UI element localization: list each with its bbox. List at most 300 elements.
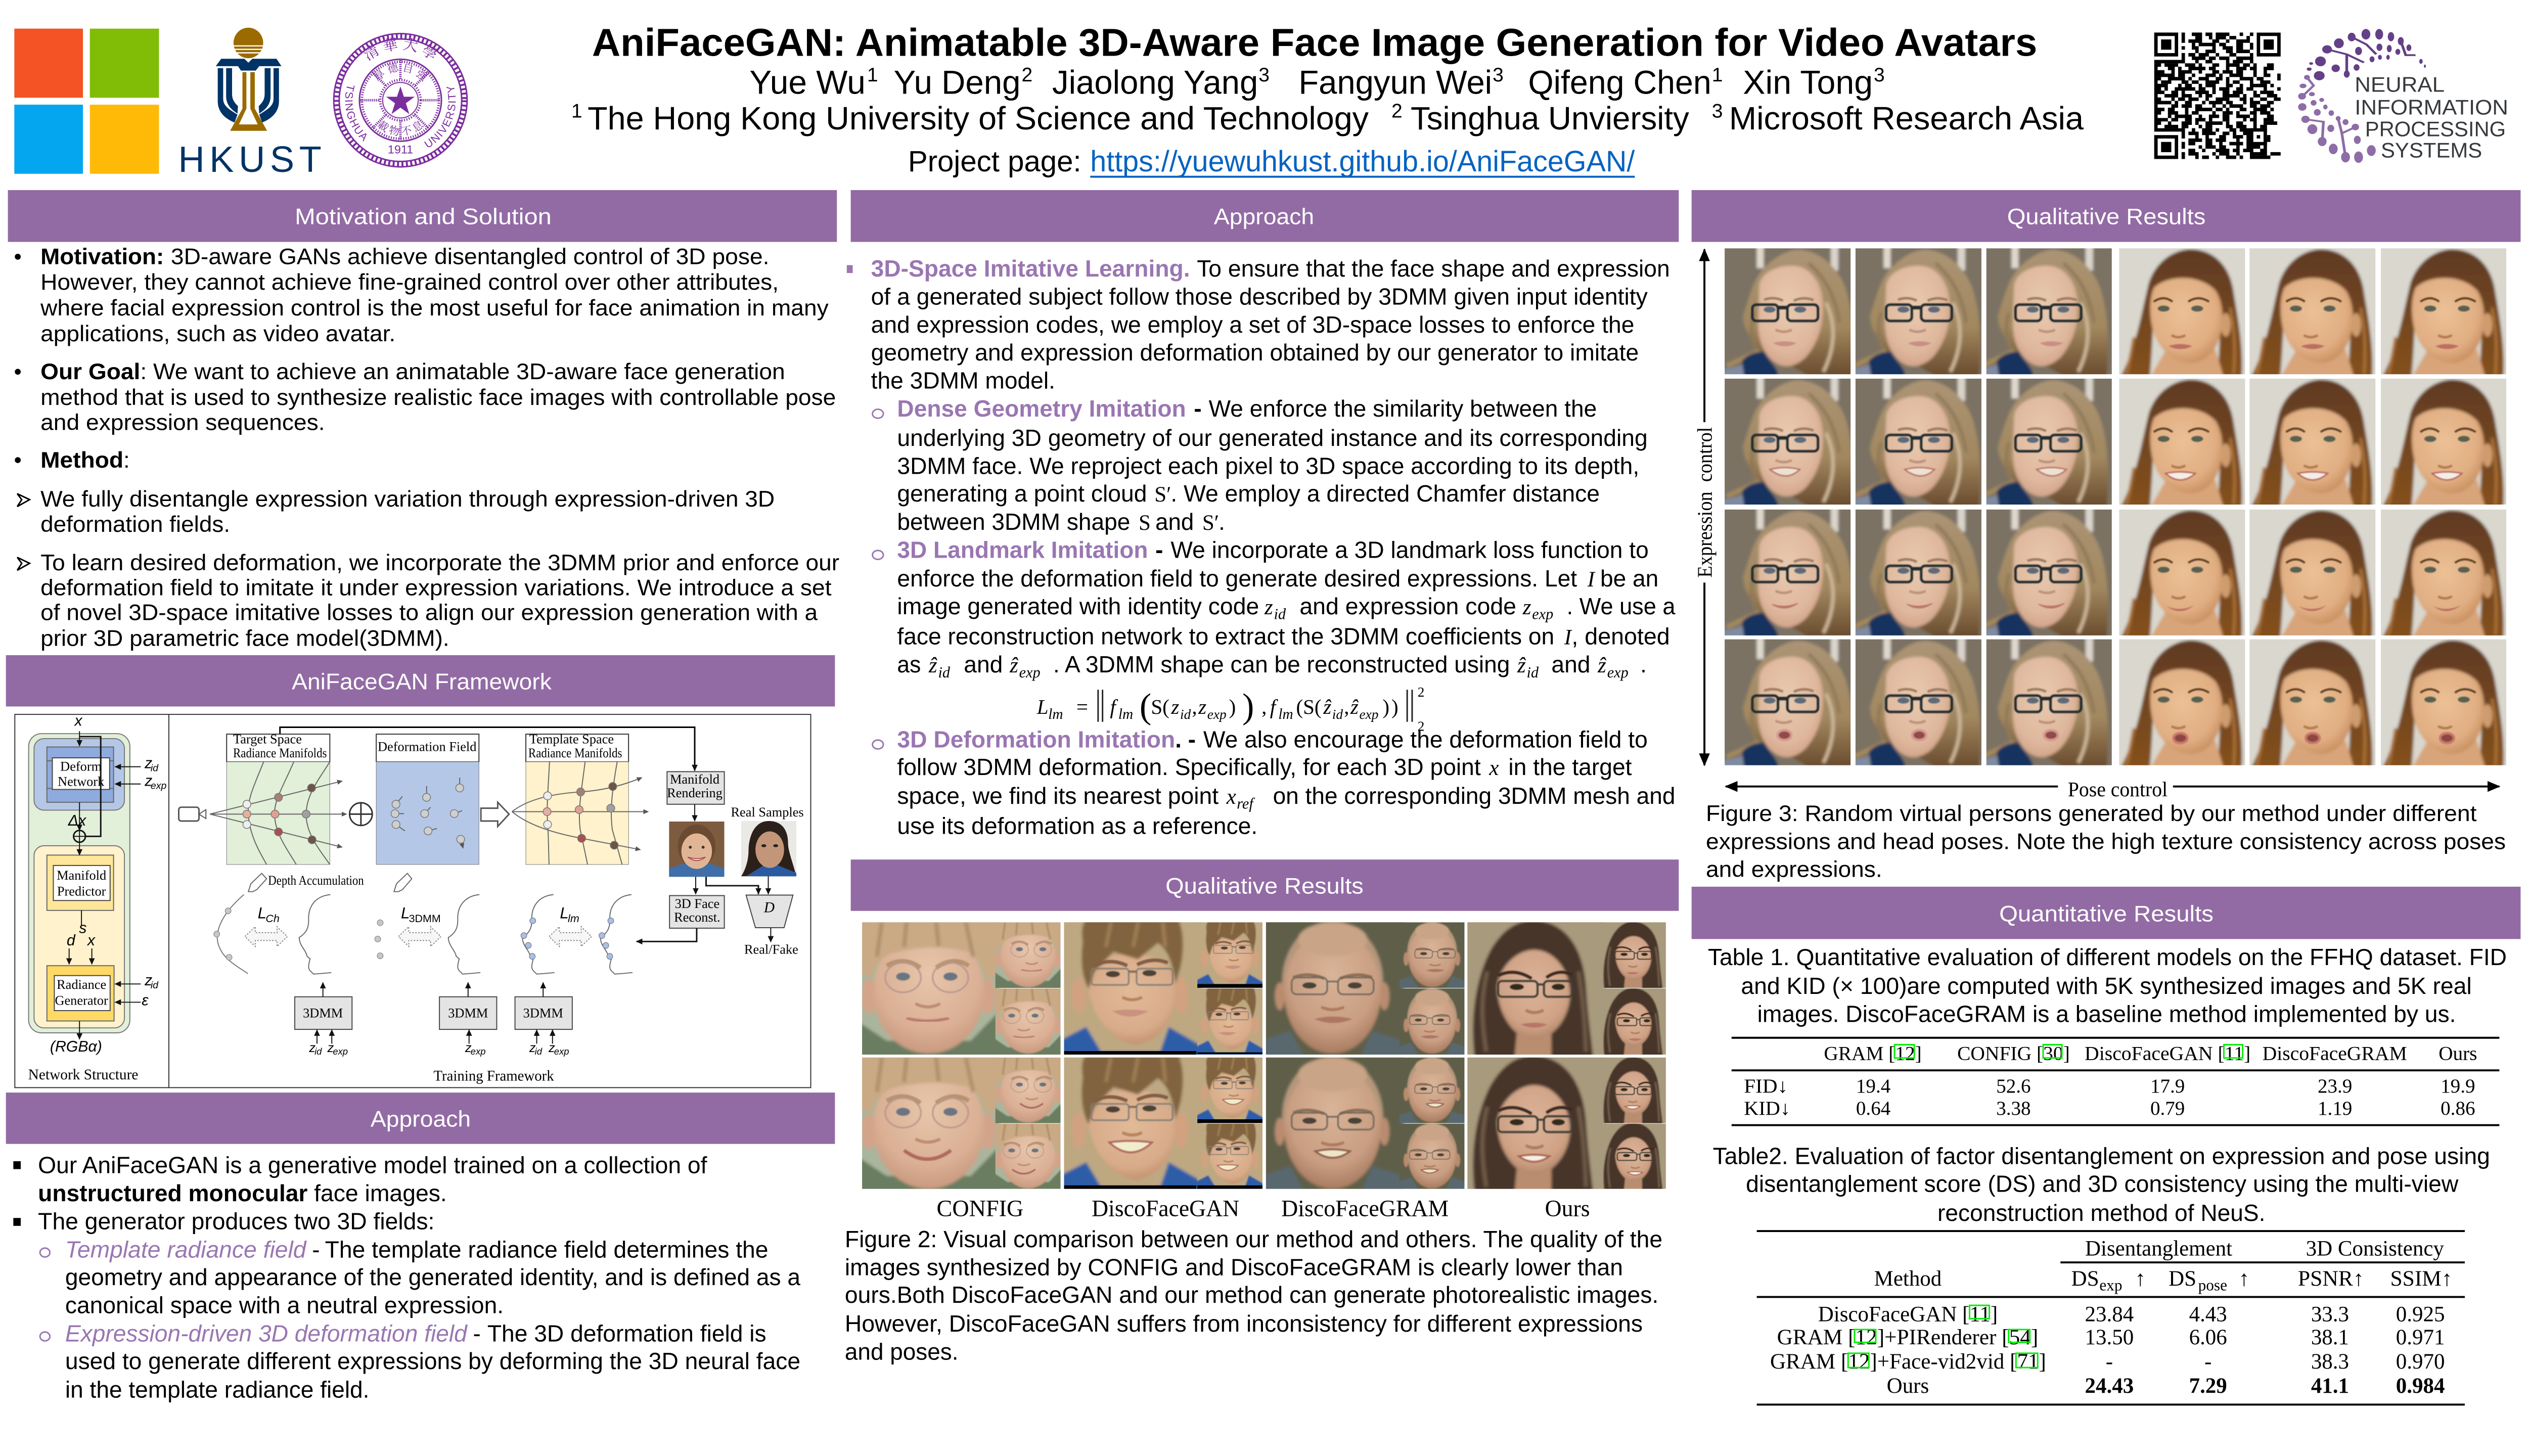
authors: 2 <box>1022 64 1032 86</box>
text block: 3D-space imitative learning: the 3DMM model. <box>871 368 1055 394</box>
table 2 <box>1757 1231 2465 1404</box>
affiliations <box>571 100 2084 136</box>
training framework: exp <box>333 1046 348 1057</box>
text block: 3D-space imitative learning: on the corresponding 3DMM mesh and <box>1273 783 1675 809</box>
network structure: Predictor <box>57 884 106 898</box>
text block: 3D-space imitative learning: z <box>1522 596 1531 619</box>
network structure: z <box>144 773 152 790</box>
figure 3 caption: Figure 3: Random virtual persons generated by our method under different <box>1706 800 2477 826</box>
table 2: SSIM↑ <box>2390 1267 2453 1291</box>
authors <box>749 64 1885 101</box>
tile: DiscoFaceGAN neutral <box>1064 922 1262 1055</box>
project page link: https://yuewuhkust.github.io/AniFaceGAN/ <box>1090 145 1635 178</box>
text block: approach left: face images. <box>314 1180 447 1206</box>
table 1 <box>1732 1038 2499 1125</box>
text block: 3D-space imitative learning: 3D Landmark Imitation <box>897 537 1148 563</box>
authors: 1 <box>867 64 878 86</box>
table 1 caption: images. DiscoFaceGRAM is a baseline method implemented by us. <box>1757 1000 2456 1027</box>
text block: 3D-space imitative learning: , denoted <box>1571 623 1670 649</box>
training framework: id <box>314 1046 322 1057</box>
tile: DiscoFaceGAN smile <box>1064 1058 1263 1189</box>
text block: 3D-space imitative learning: 3DMM face. We reproject each pixel to 3D space according to its depth, <box>897 453 1639 479</box>
table 2: - <box>2204 1350 2211 1374</box>
text block: approach left: The generator produces two 3D fields: <box>38 1208 434 1235</box>
logo: Tsinghua University seal: 載 物 不 息 <box>377 120 424 136</box>
equation: landmark loss: lm <box>1118 706 1133 722</box>
network structure: Generator <box>55 993 108 1008</box>
network structure: d <box>67 932 76 949</box>
figure 2 caption <box>845 1226 1662 1364</box>
table 1: 52.6 <box>1996 1075 2031 1097</box>
text block: approach left: - <box>473 1320 481 1346</box>
text block: 3D-space imitative learning: enforce the deformation field to generate desired expressions. Let <box>897 565 1577 592</box>
text block: 3D-space imitative learning: I <box>1564 625 1572 649</box>
table 2: 41.1 <box>2311 1374 2349 1398</box>
text block: motivation: applications, such as video avatar. <box>40 321 395 346</box>
training framework: z <box>548 1041 555 1055</box>
equation: landmark loss: id <box>1332 707 1343 722</box>
text block: approach left: used to generate different expressions by deforming the 3D neural face <box>65 1348 800 1374</box>
figure 3: expression and pose grid <box>1710 243 2524 770</box>
equation: landmark loss: , <box>1261 695 1267 718</box>
text block: approach left: in the template radiance field. <box>65 1377 369 1403</box>
training framework: z <box>327 1041 334 1055</box>
table 2: 3D Consistency <box>2306 1237 2444 1260</box>
table 2 caption <box>1713 1143 2490 1226</box>
figure 2 column labels <box>937 1195 1590 1221</box>
network structure: Radiance <box>57 977 106 992</box>
text block: 3D-space imitative learning: as <box>897 651 921 677</box>
network structure: Manifold <box>57 868 106 883</box>
equation: landmark loss: z <box>1170 695 1179 718</box>
figure 2 column labels: DiscoFaceGRAM <box>1281 1195 1449 1221</box>
authors: Yu Deng <box>894 64 1021 101</box>
text block: 3D-space imitative learning: and <box>1551 651 1591 677</box>
text block: 3D-space imitative learning: of a generated subject follow those described by 3DMM given input identity <box>871 284 1648 310</box>
title: AniFaceGAN: Animatable 3D-Aware Face Image Generation for Video Avatars <box>592 21 2037 64</box>
table 1: 0.64 <box>1856 1098 1890 1119</box>
text block: 3D-space imitative learning: id <box>1527 664 1539 681</box>
equation: landmark loss: f <box>1270 695 1279 718</box>
figure 2 column labels: CONFIG <box>937 1195 1023 1221</box>
text block: 3D-space imitative learning: and expression codes, we employ a set of 3D-space losses to enforce the <box>871 311 1634 338</box>
table 2: pose <box>2198 1277 2227 1294</box>
equation: landmark loss: lm <box>1278 706 1293 722</box>
panel heading: Qualitative Results (centre) <box>851 859 1679 911</box>
table 2: 38.3 <box>2311 1350 2349 1374</box>
network structure: Δx <box>68 812 87 829</box>
training framework: Radiance Manifolds <box>233 746 327 760</box>
equation: landmark loss: L <box>1036 695 1049 718</box>
text block: 3D-space imitative learning: We enforce the similarity between the <box>1209 395 1597 422</box>
training framework: 3DMM <box>303 1006 343 1021</box>
affiliations: Microsoft Research Asia <box>1729 100 2084 136</box>
network structure: z <box>144 972 152 989</box>
text block: motivation: : We want to achieve an animatable 3D-aware face generation <box>140 358 785 384</box>
equation: landmark loss: ) <box>1382 695 1389 718</box>
text block: 3D-space imitative learning: and expression code <box>1299 593 1516 619</box>
table 2: DiscoFaceGAN [11] <box>1818 1302 1998 1326</box>
table 1: 1.19 <box>2318 1098 2352 1119</box>
network structure: Network Structure <box>28 1067 138 1083</box>
text block: 3D-space imitative learning: . We employ a directed Chamfer distance <box>1170 480 1600 507</box>
diagram: framework <box>15 713 811 1087</box>
text block: 3D-space imitative learning: - <box>1194 395 1202 422</box>
table 1 caption <box>1708 944 2507 1027</box>
training framework: lm <box>568 913 579 925</box>
text block: 3D-space imitative learning: To ensure that the face shape and expression <box>1197 255 1670 282</box>
text block: 3D-space imitative learning: - <box>1155 537 1163 563</box>
text block: motivation: However, they cannot achieve fine-grained control over other attributes, <box>40 269 779 295</box>
network structure: Network <box>58 775 105 789</box>
text block: 3D-space imitative learning: exp <box>1607 664 1629 681</box>
equation: landmark loss: lm <box>1048 706 1063 722</box>
text block: approach left: geometry and appearance of the generated identity, and is defined as a <box>65 1264 800 1290</box>
network structure: ε <box>142 992 149 1009</box>
training framework: D <box>763 900 775 916</box>
text block: 3D-space imitative learning: . <box>1218 509 1225 535</box>
training framework: L <box>560 904 569 922</box>
training framework: exp <box>471 1046 486 1057</box>
text block: approach left: Template radiance field <box>65 1236 307 1262</box>
affiliations: Tsinghua Unviersity <box>1411 100 1690 136</box>
table 2: Method <box>1874 1267 1942 1291</box>
text block: 3D-space imitative learning: use its deformation as a reference. <box>897 812 1257 839</box>
equation: landmark loss: , <box>1344 695 1349 718</box>
affiliations: 1 <box>571 100 582 122</box>
figure 2 caption: Figure 2: Visual comparison between our method and others. The quality of the <box>845 1226 1662 1252</box>
text block: motivation: We fully disentangle expression variation through expression-driven 3D <box>40 486 775 512</box>
network structure: id <box>151 762 159 774</box>
logo: Tsinghua University seal: 厚 德 自 強 <box>373 63 427 82</box>
panel heading: Approach (left): Approach <box>371 1106 471 1132</box>
figure 3 caption: and expressions. <box>1706 856 1882 882</box>
table 2: PSNR↑ <box>2298 1267 2364 1291</box>
authors: Fangyun Wei <box>1298 64 1492 101</box>
training framework: Training Framework <box>433 1068 554 1084</box>
equation: landmark loss: , <box>1192 695 1197 718</box>
equation: landmark loss: = <box>1076 695 1088 718</box>
panel heading: AniFaceGAN Framework <box>6 655 835 706</box>
table 1: CONFIG [30] <box>1957 1043 2070 1065</box>
text block: 3D-space imitative learning: ẑ <box>1517 654 1526 677</box>
network structure: x <box>86 932 96 949</box>
text block: 3D-space imitative learning: S′ <box>1202 511 1219 535</box>
text block: 3D-space imitative learning: be an <box>1600 565 1658 592</box>
tile: Ours smile <box>1467 1058 1666 1189</box>
training framework: L <box>258 904 266 922</box>
figure 2 caption: images synthesized by CONFIG and DiscoFaceGRAM is clearly lower than <box>845 1254 1623 1280</box>
text block: 3D-space imitative learning: 3D-Space Imitative Learning. <box>871 255 1190 282</box>
panel heading: Motivation and Solution: Motivation and Solution <box>295 203 552 229</box>
text block: 3D-space imitative learning: S′ <box>1154 483 1171 507</box>
training framework: 3DMM <box>523 1006 563 1021</box>
text block: motivation: prior 3D parametric face model(3DMM). <box>40 625 449 651</box>
text block: 3D-space imitative learning: ẑ <box>928 654 937 677</box>
text block: 3D-space imitative learning: ẑ <box>1009 654 1018 677</box>
text block: motivation: Method <box>40 447 123 473</box>
text block: motivation: To learn desired deformation, we incorporate the 3DMM prior and enforce our <box>40 550 839 575</box>
panel heading: Quantitative Results: Quantitative Results <box>1999 900 2214 926</box>
figure 2: comparison faces <box>857 917 1668 1195</box>
text block: motivation: and expression sequences. <box>40 410 325 435</box>
text block: 3D-space imitative learning: . We use a <box>1567 593 1676 619</box>
project page link: Project page: <box>908 145 1081 178</box>
training framework: Real/Fake <box>744 942 798 957</box>
network structure: exp <box>151 781 166 792</box>
table 2: 33.3 <box>2311 1302 2349 1326</box>
table 2: 6.06 <box>2189 1326 2227 1349</box>
text block: 3D-space imitative learning: follow 3DMM deformation. Specifically, for each 3D point <box>897 754 1481 780</box>
table 1: 23.9 <box>2318 1075 2352 1097</box>
text block: 3D-space imitative learning: 3D Deformation Imitation <box>897 726 1175 753</box>
table 2: - <box>2106 1350 2113 1374</box>
logo: NeurIPS <box>2298 29 2508 163</box>
figure 3 caption: expressions and head poses. Note the high texture consistency across poses <box>1706 829 2506 854</box>
training framework: Deformation Field <box>378 739 476 754</box>
text block: motivation <box>15 243 839 651</box>
training framework: Rendering <box>667 786 723 800</box>
network structure: (RGBα) <box>50 1038 102 1055</box>
table 2: 38.1 <box>2311 1326 2349 1349</box>
text block: approach left: unstructured monocular <box>38 1180 308 1206</box>
table 2: 0.984 <box>2396 1374 2445 1398</box>
training framework: id <box>535 1046 543 1057</box>
table 2: 0.971 <box>2396 1326 2445 1349</box>
panel heading: Quantitative Results <box>1692 887 2520 939</box>
table 2: exp <box>2099 1277 2122 1294</box>
training framework: Template Space <box>529 732 614 747</box>
logo: Tsinghua University seal <box>333 33 468 168</box>
table 1: GRAM [12] <box>1824 1043 1922 1065</box>
table 2: GRAM [12]+Face-vid2vid [71] <box>1770 1350 2046 1374</box>
text block: 3D-space imitative learning: ẑ <box>1597 654 1606 677</box>
training framework: Radiance Manifolds <box>528 746 622 760</box>
training framework: L <box>401 904 410 922</box>
table 2 caption: disentanglement score (DS) and 3D consistency using the multi-view <box>1746 1170 2459 1197</box>
table 2: 0.925 <box>2396 1302 2445 1326</box>
panel heading: Approach (centre): Approach <box>1214 203 1314 229</box>
text block: 3D-space imitative learning: We incorporate a 3D landmark loss function to <box>1170 537 1649 563</box>
equation: landmark loss: z <box>1198 695 1206 718</box>
text block: 3D-space imitative learning: x <box>1488 756 1499 780</box>
table 2: Disentanglement <box>2085 1237 2232 1260</box>
text block: 3D-space imitative learning: id <box>938 664 951 681</box>
equation: landmark loss: f <box>1110 695 1118 718</box>
training framework: 3DMM <box>448 1006 488 1021</box>
text block: approach left: - <box>312 1236 320 1262</box>
figure 3 caption <box>1706 800 2506 882</box>
logo: NeurIPS: SYSTEMS <box>2381 139 2482 162</box>
authors: 1 <box>1712 64 1723 86</box>
training framework: Reconst. <box>674 910 720 925</box>
person B faces <box>2104 243 2524 770</box>
table 2 caption: Table2. Evaluation of factor disentanglement on expression and pose using <box>1713 1143 2490 1169</box>
logo: HKUST: HKUST <box>178 140 322 180</box>
training framework: Target Space <box>233 732 302 747</box>
panel heading: Qualitative Results (right): Qualitative Results <box>2007 203 2205 229</box>
training framework: Ch <box>265 913 280 925</box>
text block: 3D-space imitative learning: z <box>1264 596 1273 619</box>
tile: DiscoFaceGRAM smile <box>1266 1058 1464 1189</box>
table 1: 19.4 <box>1856 1075 1890 1097</box>
network structure: x <box>73 713 83 730</box>
panel heading: Approach (left) <box>6 1093 835 1144</box>
logo: Tsinghua University seal: UNIVERSITY <box>424 87 456 148</box>
network structure: z <box>144 755 152 772</box>
text block: 3D-space imitative learning: and <box>1155 509 1194 535</box>
table 2 caption: reconstruction method of NeuS. <box>1937 1200 2265 1226</box>
table 2: DS <box>2169 1267 2196 1291</box>
text block: 3D-space imitative learning: and <box>964 651 1003 677</box>
network structure: id <box>151 980 159 991</box>
QR code <box>2154 32 2281 159</box>
table 1 caption: Table 1. Quantitative evaluation of different models on the FFHQ dataset. FID <box>1708 944 2507 970</box>
figure 2 caption: and poses. <box>845 1338 959 1364</box>
equation: landmark loss: 2 <box>1418 685 1424 700</box>
table 2: DS <box>2071 1267 2099 1291</box>
table 1: DiscoFaceGAN [11] <box>2085 1043 2250 1065</box>
training framework: z <box>308 1041 315 1055</box>
table 1: FID↓ <box>1744 1075 1788 1097</box>
text block: motivation: deformation fields. <box>40 511 230 537</box>
text block: 3D-space imitative learning: ref <box>1237 795 1255 812</box>
text block: 3D-space imitative learning: I <box>1587 568 1596 592</box>
equation: landmark loss: id <box>1180 707 1191 722</box>
equation: landmark loss: ẑ <box>1350 695 1359 718</box>
table 2: 24.43 <box>2085 1374 2134 1398</box>
logo: NeurIPS: PROCESSING <box>2365 117 2506 141</box>
text block: 3D-space imitative learning: geometry and expression deformation obtained by our generator to imitate <box>871 339 1639 366</box>
equation: landmark loss: ) <box>1242 687 1254 726</box>
authors: Xin Tong <box>1743 64 1873 101</box>
logo: Microsoft <box>14 29 159 174</box>
logo: NeurIPS: INFORMATION <box>2355 96 2508 119</box>
text block: motivation: of novel 3D-space imitative losses to align our expression generation with a <box>40 600 818 625</box>
training framework: Manifold <box>670 772 719 787</box>
logo: Tsinghua University seal: 1911 <box>388 143 413 156</box>
text block: 3D-space imitative learning <box>847 255 1676 839</box>
table 2: 23.84 <box>2085 1302 2134 1326</box>
person A faces <box>1710 243 2123 770</box>
authors: 3 <box>1258 64 1270 86</box>
table 2: 0.970 <box>2396 1350 2445 1374</box>
authors: Qifeng Chen <box>1528 64 1711 101</box>
tile: CONFIG smile <box>862 1058 1061 1189</box>
network structure: Deform <box>60 759 102 774</box>
text block: 3D-space imitative learning: image generated with identity code <box>897 593 1259 619</box>
table 1: 17.9 <box>2150 1075 2185 1097</box>
text block: 3D-space imitative learning: exp <box>1019 664 1041 681</box>
logo: Tsinghua University seal: 清 華 大 學 <box>363 37 437 61</box>
figure 2 caption: However, DiscoFaceGAN suffers from inconsistency for different expressions <box>845 1310 1643 1337</box>
text block: motivation: method that is used to synthesize realistic face images with controllable pose <box>40 384 836 410</box>
table 1: KID↓ <box>1744 1098 1790 1119</box>
table 1: 0.79 <box>2150 1098 2185 1119</box>
tile: CONFIG neutral <box>862 922 1061 1055</box>
text block: motivation: where facial expression control is the most useful for face animation in many <box>40 295 829 321</box>
network structure: s <box>79 920 86 937</box>
text block: approach left: The 3D deformation field is <box>487 1320 766 1346</box>
text block: motivation: Our Goal <box>40 358 140 384</box>
tile: DiscoFaceGRAM neutral <box>1266 922 1464 1055</box>
table 2: 4.43 <box>2189 1302 2227 1326</box>
table 1 caption: and KID (× 100)are computed with 5K synthesized images and 5K real <box>1741 973 2472 999</box>
table 2: ↑ <box>2239 1267 2249 1291</box>
equation: landmark loss: ( <box>1140 687 1151 726</box>
panel heading: Qualitative Results (centre): Qualitative Results <box>1165 873 1364 899</box>
equation: landmark loss: S( <box>1151 695 1169 718</box>
figure 2 column labels: Ours <box>1545 1195 1590 1221</box>
panel heading: AniFaceGAN Framework: AniFaceGAN Framework <box>292 668 552 694</box>
table 1: Ours <box>2439 1043 2477 1065</box>
text block: 3D-space imitative learning: x <box>1226 785 1236 809</box>
panel heading: Qualitative Results (right) <box>1692 190 2520 242</box>
table 2: 7.29 <box>2189 1374 2227 1398</box>
training framework: z <box>529 1041 536 1055</box>
text block: motivation: deformation field to imitate it under expression variations. We introduce a set <box>40 575 832 601</box>
text block: 3D-space imitative learning: . - <box>1175 726 1196 753</box>
table 2: ↑ <box>2135 1267 2146 1291</box>
text block: 3D-space imitative learning: face reconstruction network to extract the 3DMM coefficients on <box>897 623 1554 649</box>
panel heading: Approach (centre) <box>851 190 1679 242</box>
text block: approach left: The template radiance field determines the <box>325 1236 769 1262</box>
equation: landmark loss: exp <box>1207 707 1227 722</box>
training framework: 3DMM <box>409 913 441 925</box>
affiliations: The Hong Kong University of Science and Technology <box>588 100 1369 136</box>
table 2: GRAM [12]+PIRenderer [54] <box>1777 1326 2038 1349</box>
text block: 3D-space imitative learning: exp <box>1532 606 1553 623</box>
arrow: pose control: Pose control <box>2068 778 2168 801</box>
training framework: exp <box>554 1046 569 1057</box>
network structure <box>28 713 166 1083</box>
text block: motivation: Motivation: <box>40 243 164 269</box>
text block: approach left: Expression-driven 3D deformation field <box>65 1320 468 1346</box>
table 1: 3.38 <box>1996 1098 2031 1119</box>
panel heading: Motivation and Solution <box>8 190 837 242</box>
text block: 3D-space imitative learning: space, we find its nearest point <box>897 783 1218 809</box>
text block: 3D-space imitative learning: in the target <box>1508 754 1632 780</box>
text block: approach left: Our AniFaceGAN is a generative model trained on a collection of <box>38 1152 707 1178</box>
tile: Ours neutral <box>1467 922 1666 1055</box>
equation: landmark loss: 2 <box>1418 718 1424 734</box>
affiliations: 3 <box>1712 100 1723 122</box>
text block: 3D-space imitative learning: generating a point cloud <box>897 480 1147 507</box>
table 1: 19.9 <box>2441 1075 2475 1097</box>
text block: approach left: canonical space with a neutral expression. <box>65 1292 504 1318</box>
authors: 3 <box>1874 64 1885 86</box>
table 1: 0.86 <box>2441 1098 2475 1119</box>
text block: 3D-space imitative learning: between 3DMM shape <box>897 509 1130 535</box>
text block: approach left <box>13 1152 800 1403</box>
logo: HKUST <box>178 28 322 180</box>
authors: 3 <box>1493 64 1504 86</box>
text block: 3D-space imitative learning: . A 3DMM shape can be reconstructed using <box>1053 651 1510 677</box>
equation: landmark loss: ẑ <box>1323 695 1332 718</box>
text block: 3D-space imitative learning: id <box>1274 606 1286 623</box>
figure 2 column labels: DiscoFaceGAN <box>1092 1195 1239 1221</box>
table 2: Ours <box>1887 1374 1929 1398</box>
logo: NeurIPS: NEURAL <box>2355 73 2445 97</box>
table 2: 13.50 <box>2085 1326 2134 1349</box>
affiliations: 2 <box>1391 100 1403 122</box>
training framework: Depth Accumulation <box>268 873 364 888</box>
training framework: Real Samples <box>731 805 804 820</box>
equation: landmark loss: (S( <box>1296 695 1322 718</box>
equation: landmark loss <box>1036 685 1424 734</box>
training framework: z <box>465 1041 472 1055</box>
training framework: 3D Face <box>675 896 719 911</box>
